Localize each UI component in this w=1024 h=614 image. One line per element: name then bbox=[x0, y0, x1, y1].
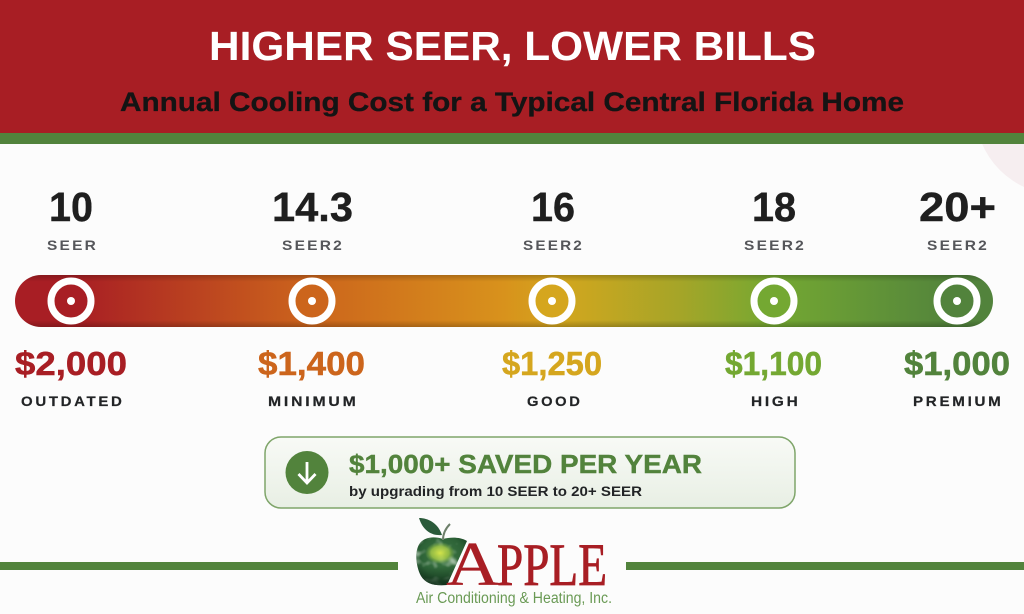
wordmark: A bbox=[446, 531, 500, 599]
subtitle: Annual Cooling Cost for a Typical Central Florida Home bbox=[120, 87, 904, 117]
tier labels row: PREMIUM bbox=[913, 393, 1004, 409]
marker: 20+ SEER2 bbox=[937, 281, 977, 321]
SEER ratings row: SEER2 bbox=[744, 237, 806, 253]
logo bbox=[412, 518, 612, 607]
SEER ratings row: 14.3 bbox=[272, 184, 353, 230]
savings headline: $1,000+ SAVED PER YEAR bbox=[349, 449, 702, 479]
annual costs row bbox=[15, 345, 1010, 382]
gradient scale bar bbox=[15, 275, 993, 327]
annual costs row: $1,000 bbox=[904, 345, 1010, 382]
wordmark letters: PPLE bbox=[497, 532, 607, 598]
marker: 14.3 SEER2 bbox=[292, 281, 332, 321]
SEER ratings row: 20+ bbox=[919, 184, 996, 230]
header banner bbox=[0, 0, 1024, 144]
SEER ratings row: SEER2 bbox=[282, 237, 344, 253]
marker: 16 SEER2 bbox=[532, 281, 572, 321]
icon: apple globe bbox=[416, 518, 467, 586]
SEER ratings row: 16 bbox=[531, 184, 575, 230]
icon: down arrow bbox=[286, 451, 328, 494]
tier labels row bbox=[21, 393, 1004, 409]
annual costs row: $2,000 bbox=[15, 345, 127, 382]
SEER ratings row: 18 bbox=[752, 184, 796, 230]
SEER ratings row: SEER2 bbox=[523, 237, 584, 253]
SEER ratings row: SEER bbox=[47, 237, 98, 253]
SEER ratings row: 10 bbox=[49, 184, 93, 230]
SEER ratings row: SEER2 bbox=[927, 237, 989, 253]
title: HIGHER SEER, LOWER BILLS bbox=[209, 23, 816, 69]
marker: 10 SEER bbox=[51, 281, 91, 321]
annual costs row: $1,400 bbox=[258, 345, 365, 382]
annual costs row: $1,250 bbox=[502, 345, 602, 382]
tier labels row: GOOD bbox=[527, 393, 582, 409]
savings callout bbox=[265, 437, 795, 508]
tagline: Air Conditioning & Heating, Inc. bbox=[416, 590, 612, 607]
savings note: by upgrading from 10 SEER to 20+ SEER bbox=[349, 484, 642, 499]
annual costs row: $1,100 bbox=[725, 345, 822, 382]
tier labels row: OUTDATED bbox=[21, 393, 124, 409]
decorative corner circle bbox=[975, 25, 1024, 195]
footer rule left bbox=[0, 562, 398, 570]
tier labels row: HIGH bbox=[751, 393, 800, 409]
SEER ratings row bbox=[47, 184, 996, 253]
tier labels row: MINIMUM bbox=[268, 393, 358, 409]
marker: 18 SEER2 bbox=[754, 281, 794, 321]
footer rule right bbox=[626, 562, 1024, 570]
